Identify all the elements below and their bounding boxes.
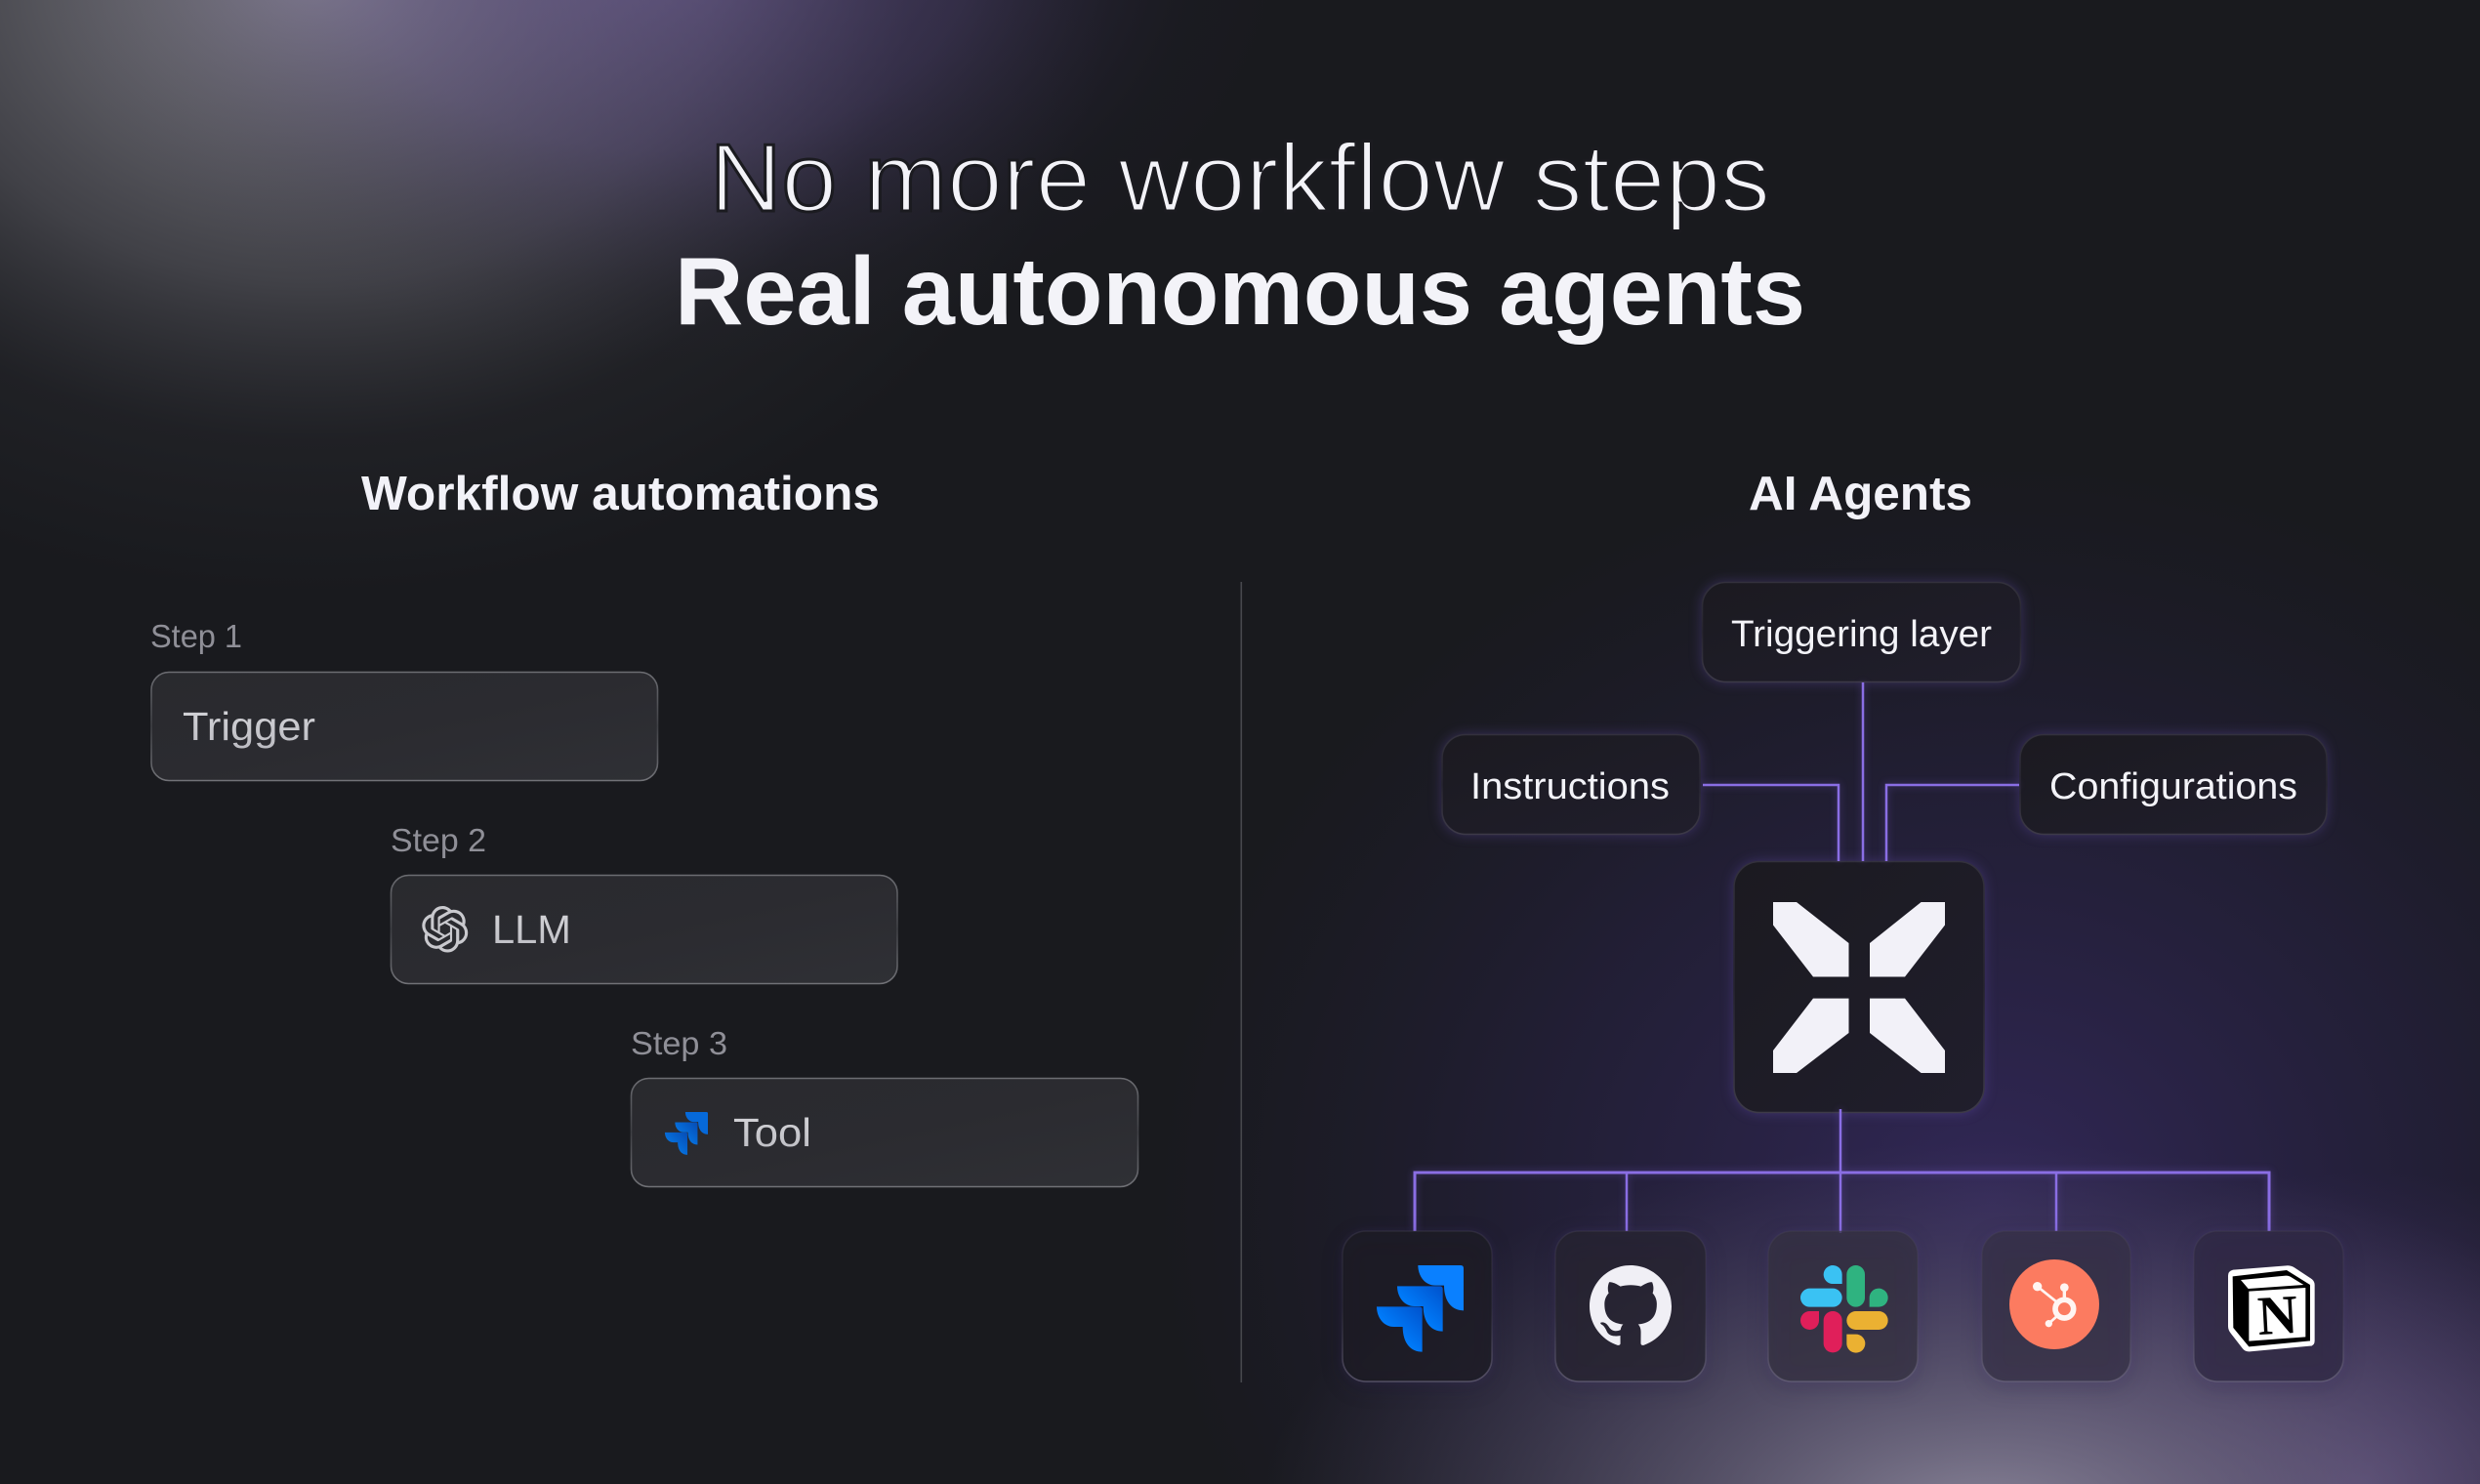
icon: agent logo xyxy=(1773,902,1945,1073)
icon: slack xyxy=(1800,1265,1888,1353)
step 1 xyxy=(150,618,658,781)
icon: openai xyxy=(422,906,468,953)
node: instructions xyxy=(1442,734,1700,834)
tool: slack xyxy=(1768,1231,1918,1381)
step 2: Step 2 xyxy=(391,822,486,858)
step 2: LLM xyxy=(492,907,571,952)
title xyxy=(675,124,1805,345)
heading: ai agents: AI Agents xyxy=(1749,468,1972,520)
step 1: Trigger xyxy=(183,704,315,749)
tool: jira xyxy=(1343,1231,1492,1381)
connector: agent to tools xyxy=(1415,1109,2269,1233)
step 1: Step 1 xyxy=(150,618,242,654)
icon: github xyxy=(1590,1265,1672,1345)
title: Real autonomous agents xyxy=(675,237,1805,345)
panel: workflow automations xyxy=(150,468,1138,1187)
step 3: Tool xyxy=(733,1110,811,1155)
node: triggering layer xyxy=(1703,582,2021,681)
tool: notion xyxy=(2194,1231,2343,1381)
icon: jira xyxy=(1377,1265,1464,1352)
title: No more workflow steps xyxy=(710,124,1770,231)
step 3: Step 3 xyxy=(631,1025,727,1061)
tool: github xyxy=(1555,1231,1706,1381)
node: triggering layer: Triggering layer xyxy=(1731,614,1992,655)
icon: hubspot xyxy=(2009,1259,2099,1349)
panel: ai agents xyxy=(1343,468,2343,1381)
tool: hubspot xyxy=(1982,1231,2130,1381)
icon: notion xyxy=(2228,1265,2315,1351)
icon: notion: N xyxy=(2256,1285,2299,1347)
background glow: bottom right xyxy=(976,293,2480,1484)
node: configurations xyxy=(2020,734,2327,834)
node: configurations: Configurations xyxy=(2049,766,2297,807)
divider between panels xyxy=(1240,582,1242,1382)
step 2 xyxy=(391,822,897,984)
icon: jira small xyxy=(665,1112,708,1155)
node: instructions: Instructions xyxy=(1470,766,1670,807)
step 3 xyxy=(631,1025,1138,1187)
background glow: top left xyxy=(0,0,1367,683)
heading: workflow automations: Workflow automations xyxy=(361,468,880,520)
connector: inputs to agent xyxy=(1703,682,2019,861)
node: central agent xyxy=(1734,861,1984,1113)
